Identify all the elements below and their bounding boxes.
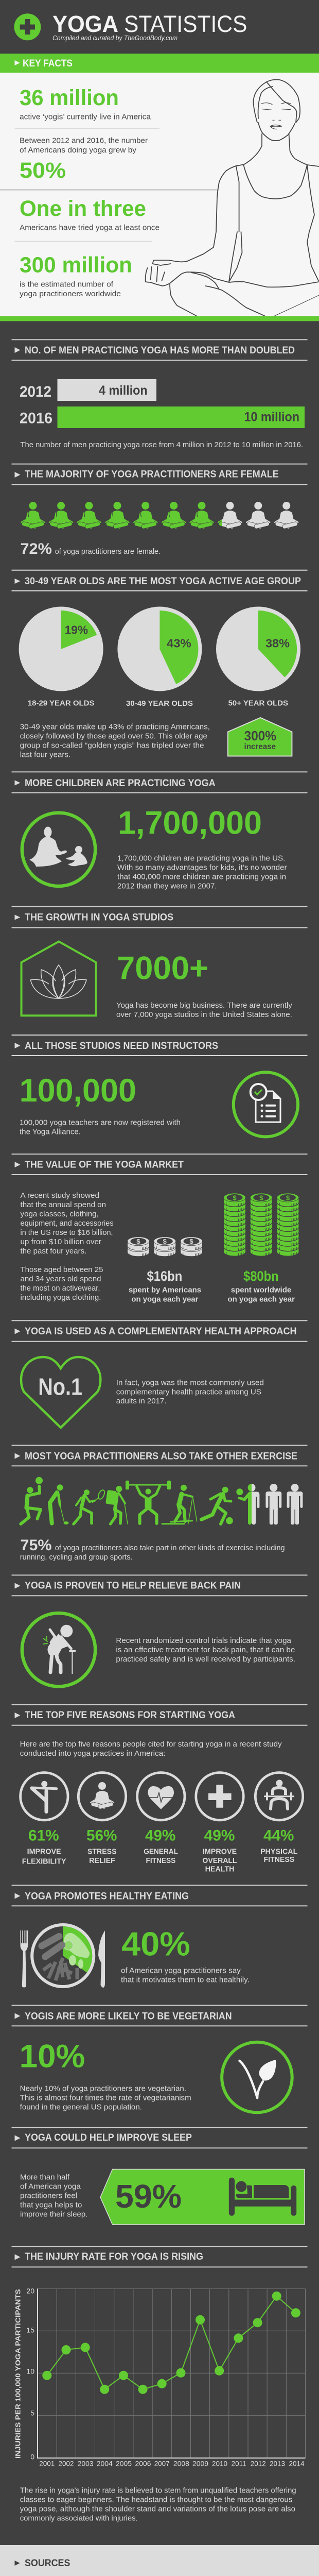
icon: certificate document — [234, 1072, 298, 1137]
figure: soccer — [201, 1487, 233, 1524]
text: activewear: including yoga clothing. — [21, 1293, 101, 1302]
text: children: that 400,000 more children are practicing yoga in — [117, 873, 286, 882]
stat: 72 percent: 72% — [21, 540, 52, 557]
reason: general fitness — [137, 1772, 185, 1865]
key facts heading: KEY FACTS — [23, 58, 73, 69]
text: studios: over 7,000 yoga studios in the United States alone. — [116, 1010, 292, 1019]
section heading: YOGA PROMOTES HEALTHY EATING — [25, 1891, 189, 1902]
section heading: YOGA COULD HELP IMPROVE SLEEP — [25, 2132, 192, 2143]
stat: 100,000: 100,000 — [20, 1073, 136, 1109]
text: most commonly used: adults in 2017. — [116, 1397, 166, 1405]
stat: one in three: Americans have tried yoga at least once — [20, 224, 160, 232]
line chart: injuries per 100,000: 2009 — [192, 2460, 208, 2468]
section heading: THE TOP FIVE REASONS FOR STARTING YOGA — [25, 1710, 235, 1721]
stat: 300 million — [20, 253, 132, 298]
reason: physical fitness: FITNESS — [263, 1855, 294, 1864]
section heading — [11, 771, 308, 793]
stat: 80bn: $80bn — [243, 1268, 279, 1284]
line chart: injuries per 100,000: 2012 — [251, 2460, 266, 2468]
reason: flexibility — [21, 1772, 68, 1866]
text: vegetarian: found in the general US population. — [20, 2103, 142, 2112]
section heading — [11, 2246, 308, 2267]
panel: children — [11, 771, 308, 891]
text: injury explanation: The rise in yoga’s injury rate is believed to stem from unqualified teachers offering — [20, 2486, 296, 2495]
callout: 300 percent increase: increase — [244, 742, 276, 751]
text: sleep: of American yoga — [20, 2182, 81, 2191]
line chart: injuries per 100,000: 2010 — [212, 2460, 227, 2468]
panel: healthy eating — [11, 1885, 308, 1988]
header — [0, 0, 319, 54]
reason: physical fitness: PHYSICAL — [260, 1847, 297, 1856]
stat: 50% growth: of Americans doing yoga grew by — [20, 146, 137, 155]
sources heading: SOURCES — [25, 2558, 70, 2569]
section heading — [11, 339, 308, 361]
reason: physical fitness — [255, 1772, 303, 1864]
text: sleep: More than half — [20, 2173, 70, 2182]
pie chart: 30-49 — [117, 607, 202, 708]
reason: flexibility: IMPROVE — [27, 1847, 61, 1856]
text: children: 2012 than they were in 2007. — [117, 882, 217, 891]
line chart: injuries per 100,000: 2002 — [59, 2460, 74, 2468]
stat: 75 percent: running, cycling and group sports. — [20, 1553, 133, 1562]
section heading — [11, 1154, 308, 1175]
text: children: 1,700,000 children are practicing yoga in the US. — [117, 854, 285, 863]
icon: grey coin stacks — [128, 1237, 202, 1257]
icon: green coin stacks: $ — [233, 1194, 237, 1201]
icon: plate with fork and knife — [21, 1925, 105, 1988]
panel: yoga studios — [11, 906, 308, 1019]
text: annual spend — [21, 1191, 114, 1256]
callout: 59 percent tag with bed — [100, 2169, 305, 2225]
pictogram: sports figures — [21, 1477, 303, 1524]
line chart: injuries per 100,000: 2004 — [97, 2460, 113, 2468]
section heading: YOGA IS PROVEN TO HELP RELIEVE BACK PAIN — [25, 1580, 241, 1591]
illustration: meditating woman — [146, 79, 319, 316]
line chart: injuries per 100,000: 2008 — [173, 2460, 189, 2468]
stat: 16bn: spent by Americans — [129, 1285, 201, 1294]
bar chart: men 2012 vs 2016: 4 million — [99, 383, 148, 398]
pie chart: 18-29 — [19, 607, 103, 707]
text: children: With so many advantages for kids, it’s no wonder — [117, 863, 287, 872]
stat: 36 million: 36 million — [20, 86, 119, 110]
pie chart: 18-29: 18-29 YEAR OLDS — [28, 699, 94, 707]
icon: heart with No.1: No.1 — [38, 1373, 82, 1400]
stat: one in three — [20, 196, 160, 232]
section heading: THE GROWTH IN YOGA STUDIOS — [25, 912, 173, 923]
text: sleep: improve their sleep. — [20, 2210, 87, 2219]
section heading: ALL THOSE STUDIOS NEED INSTRUCTORS — [25, 1041, 218, 1052]
panel: vegetarian — [11, 2005, 308, 2112]
text: intro — [20, 1740, 282, 1758]
text: injury explanation: classes to eager beginners. The headstand is thought to be the most dangerous — [20, 2495, 292, 2504]
text: sleep: practitioners feel — [20, 2192, 77, 2200]
reason: flexibility: 61% — [28, 1827, 59, 1844]
section heading — [11, 1885, 308, 1906]
reason: improve overall health: HEALTH — [205, 1865, 235, 1873]
line chart: injuries per 100,000: 2013 — [270, 2460, 285, 2468]
section heading — [11, 1445, 308, 1466]
text: golden yogis: 30-49 year olds make up 43% of practicing Americans, — [20, 723, 210, 732]
pie chart: 50+ — [216, 607, 300, 707]
panel: men practicing yoga — [11, 339, 308, 449]
text: sleep: that yoga helps to — [20, 2201, 82, 2210]
text: injury explanation — [20, 2486, 296, 2522]
stat: 80bn: spent worldwide — [231, 1285, 291, 1294]
text: most commonly used: complementary health practice among US — [116, 1387, 261, 1396]
line chart: injuries per 100,000: 2007 — [154, 2460, 170, 2468]
section heading: YOGA IS USED AS A COMPLEMENTARY HEALTH APPROACH — [25, 1326, 296, 1337]
text: golden yogis: last four years. — [20, 751, 70, 759]
section heading — [11, 2127, 308, 2148]
panel: key facts — [0, 54, 319, 316]
stat: 80bn — [227, 1268, 295, 1303]
stat: 40 percent: 40% — [121, 1925, 190, 1963]
icon: grey coin stacks: $ — [163, 1238, 167, 1245]
reason: general fitness: GENERAL — [144, 1847, 178, 1856]
text: back pain: practiced safely and is well received by participants. — [116, 1655, 295, 1664]
reason: stress relief — [78, 1772, 126, 1865]
icon: green coin stacks: $ — [286, 1194, 290, 1201]
stat: 72 percent: of yoga practitioners are female. — [55, 547, 161, 556]
line chart: injuries per 100,000: 2014 — [289, 2460, 305, 2468]
stat: 72 percent — [21, 540, 161, 557]
stat: 16bn: on yoga each year — [131, 1295, 199, 1303]
pie chart: 50+: 38% — [265, 637, 290, 650]
panel: female practitioners — [11, 464, 308, 557]
line chart: injuries per 100,000: 5 — [30, 2409, 34, 2417]
line chart: injuries per 100,000: 2011 — [232, 2460, 246, 2468]
text: annual spend: A recent study showed — [21, 1191, 99, 1200]
subtitle: Compiled and curated by TheGoodBody.com — [52, 34, 178, 42]
section heading — [11, 2005, 308, 2026]
text: most commonly used — [116, 1378, 264, 1405]
pie chart: 50+: 50+ YEAR OLDS — [228, 699, 288, 707]
text: sleep — [20, 2173, 87, 2219]
reason: improve overall health: 49% — [204, 1827, 235, 1844]
panel: other exercise — [11, 1445, 308, 1562]
reason: general fitness: FITNESS — [146, 1856, 175, 1865]
line chart: injuries per 100,000: 2006 — [135, 2460, 151, 2468]
stat: 16bn — [129, 1268, 201, 1303]
title: YOGA — [52, 11, 118, 37]
line chart: injuries per 100,000 — [13, 2287, 306, 2468]
stat: 300 million: 300 million — [20, 253, 132, 278]
panel: sources — [0, 2545, 319, 2576]
text: annual spend: that the annual spend on — [21, 1200, 106, 1209]
pie chart: 30-49: 43% — [167, 637, 191, 650]
line chart: injuries per 100,000: 2003 — [78, 2460, 94, 2468]
section heading — [11, 1035, 308, 1056]
stat: 36 million: active ‘yogis’ currently live in America — [20, 113, 151, 122]
stat: one in three: One in three — [20, 196, 146, 221]
icon: mother and child — [22, 813, 95, 886]
text: golden yogis: group of so-called “golden yogis” has tripled over the — [20, 741, 204, 750]
reason: stress relief: 56% — [86, 1827, 117, 1844]
callout: 59 percent tag with bed: 59% — [115, 2178, 182, 2215]
text: activewear: the most on activewear, — [21, 1284, 100, 1293]
text: back pain — [116, 1636, 295, 1664]
text: vegetarian: This is almost four times the rate of vegetarianism — [20, 2094, 191, 2103]
icon: bed — [229, 2178, 296, 2216]
text: motivates — [121, 1966, 250, 1984]
stat: 16bn: $16bn — [147, 1268, 182, 1284]
section heading — [11, 1574, 308, 1596]
section heading: 30-49 YEAR OLDS ARE THE MOST YOGA ACTIVE AGE GROUP — [25, 576, 301, 587]
figure: golf — [50, 1484, 69, 1524]
reason: stress relief: RELIEF — [89, 1856, 115, 1865]
text: instructors — [20, 1118, 181, 1136]
title — [52, 11, 247, 37]
line chart: injuries per 100,000: 10 — [26, 2367, 34, 2375]
title: STATISTICS — [124, 11, 247, 37]
text: instructors: the Yoga Alliance. — [20, 1127, 81, 1136]
figure: weightlifter — [126, 1481, 171, 1523]
panel: instructors — [11, 1035, 308, 1137]
line chart: injuries per 100,000: 20 — [26, 2287, 34, 2295]
icon: heart with No.1 — [21, 1357, 100, 1428]
reason: improve overall health — [196, 1772, 243, 1873]
icon: plant in circle — [222, 2042, 292, 2112]
text: intro: Here are the top five reasons people cited for starting yoga in a recent study — [20, 1740, 282, 1749]
text: most commonly used: In fact, yoga was the most commonly used — [116, 1378, 264, 1387]
figure: hiker — [105, 1486, 128, 1524]
panel: value of the market — [11, 1154, 308, 1303]
pie chart: 18-29: 19% — [65, 623, 88, 637]
figure: half-filled person with ball — [236, 1484, 259, 1524]
figure: tennis — [74, 1489, 106, 1524]
text: golden yogis: closely followed by those aged over 50. This older age — [20, 732, 207, 741]
bar chart: men 2012 vs 2016: 2016 — [20, 410, 52, 427]
text: motivates: that it motivates them to eat healthily. — [121, 1975, 250, 1984]
text: activewear — [21, 1265, 103, 1302]
section heading — [11, 1320, 308, 1342]
reason: improve overall health: IMPROVE — [203, 1847, 237, 1856]
stat: 75 percent: 75% — [21, 1537, 51, 1554]
text: studios: Yoga has become big business. There are currently — [116, 1001, 292, 1010]
section heading: MOST YOGA PRACTITIONERS ALSO TAKE OTHER EXERCISE — [25, 1451, 297, 1462]
pictogram: 72 percent of figures — [21, 502, 298, 529]
line chart: injuries per 100,000: 15 — [26, 2326, 34, 2334]
pie chart: 30-49: 30-49 YEAR OLDS — [126, 699, 193, 708]
stat: 75 percent — [20, 1537, 285, 1562]
stat: 300 million: is the estimated number of — [20, 280, 114, 289]
text: golden yogis — [20, 723, 210, 759]
text: annual spend: up from $10 billion over — [21, 1238, 101, 1246]
text: studios — [116, 1001, 292, 1019]
text: intro: conducted into yoga practices in America: — [20, 1749, 165, 1758]
figure: grey person — [265, 1484, 281, 1524]
reason: stress relief: STRESS — [87, 1847, 116, 1856]
text: activewear: and 34 years old spend — [21, 1275, 101, 1283]
reason: improve overall health: OVERALL — [202, 1856, 237, 1865]
section heading: YOGIS ARE MORE LIKELY TO BE VEGETARIAN — [25, 2011, 232, 2022]
caption: The number of men practicing yoga rose from 4 million in 2012 to 10 million in 2016. — [21, 440, 303, 449]
text: annual spend: in the US rose to $16 billion, — [21, 1228, 113, 1237]
key facts heading — [0, 54, 319, 73]
bar chart: men 2012 vs 2016: 10 million — [244, 410, 299, 425]
stat: 50% growth — [20, 137, 148, 183]
text: instructors: 100,000 yoga teachers are now registered with — [20, 1118, 181, 1127]
text: back pain: Recent randomized control trials indicate that yoga — [116, 1636, 292, 1645]
text: injury explanation: yoga pose, although the shoulder stand and variations of the lotus pose are also — [20, 2504, 295, 2513]
text: annual spend: equipment, and accessories — [21, 1219, 114, 1228]
icon: green coin stacks: $ — [259, 1194, 263, 1201]
section heading — [11, 1704, 308, 1726]
panel: top five reasons — [11, 1704, 308, 1873]
section heading — [11, 570, 308, 591]
section heading — [11, 906, 308, 928]
text: motivates: of American yoga practitioners say — [121, 1966, 241, 1975]
icon: green coin stacks — [224, 1193, 299, 1256]
bar chart: men 2012 vs 2016: 2012 — [20, 383, 51, 400]
line chart: injuries per 100,000: 2001 — [39, 2460, 55, 2468]
section heading: MORE CHILDREN ARE PRACTICING YOGA — [25, 778, 216, 789]
stat: 36 million — [20, 86, 151, 122]
stat: 80bn: on yoga each year — [227, 1295, 295, 1303]
text: injury explanation: commonly associated with injuries. — [20, 2514, 138, 2522]
stat: 50% growth: 50% — [20, 158, 66, 183]
stat: 75 percent: of yoga practitioners also take part in other kinds of exercise including — [55, 1544, 285, 1552]
panel: injury rate — [11, 2246, 308, 2522]
callout: 300 percent increase — [228, 718, 292, 756]
section heading: THE VALUE OF THE YOGA MARKET — [25, 1160, 184, 1171]
reason: flexibility: FLEXIBILITY — [22, 1857, 66, 1866]
stat: 7000+: 7000+ — [117, 951, 208, 987]
callout: 300 percent increase: 300% — [244, 728, 276, 743]
text: back pain: is an effective treatment for back pain, that it can be — [116, 1646, 295, 1654]
reason: general fitness: 49% — [145, 1827, 175, 1844]
stat: 300 million: yoga practitioners worldwide — [20, 290, 121, 298]
section heading — [11, 464, 308, 485]
text: activewear: Those aged between 25 — [21, 1265, 103, 1274]
figure: skier — [162, 1485, 197, 1524]
figure: basketball — [21, 1477, 43, 1524]
bar chart: men 2012 vs 2016 — [20, 379, 305, 428]
panel: complementary health — [11, 1320, 308, 1428]
figure: grey person — [287, 1484, 303, 1524]
text: annual spend: yoga classes, clothing, — [21, 1210, 99, 1218]
text: vegetarian: Nearly 10% of yoga practitioners are vegetarian. — [20, 2084, 186, 2093]
line chart: injuries per 100,000: 0 — [30, 2452, 34, 2461]
panel: back pain — [11, 1574, 308, 1686]
section heading: NO. OF MEN PRACTICING YOGA HAS MORE THAN DOUBLED — [25, 345, 295, 356]
stat: 1,700,000: 1,700,000 — [118, 805, 262, 841]
icon: logo plus — [14, 13, 41, 40]
icon: studio house with lotus — [22, 942, 96, 1015]
icon: grey coin stacks: $ — [136, 1238, 140, 1245]
stat: 50% growth: Between 2012 and 2016, the number — [20, 137, 148, 145]
line chart: injuries per 100,000: 2005 — [116, 2460, 132, 2468]
icon: grey coin stacks: $ — [189, 1238, 193, 1245]
text: annual spend: the past four years. — [21, 1247, 86, 1256]
panel: sleep — [11, 2127, 308, 2225]
section heading: THE MAJORITY OF YOGA PRACTITIONERS ARE FEMALE — [25, 469, 279, 480]
reason: physical fitness: 44% — [263, 1827, 294, 1844]
line chart: injuries per 100,000: INJURIES PER 100,000 YOGA PARTICIPANTS — [13, 2289, 22, 2459]
icon: person with back pain — [22, 1613, 95, 1686]
stat: 10 percent: 10% — [20, 2039, 85, 2075]
text: vegetarian — [20, 2084, 191, 2112]
section heading: THE INJURY RATE FOR YOGA IS RISING — [25, 2251, 203, 2262]
panel: age groups — [11, 570, 308, 759]
text: children — [117, 854, 287, 891]
